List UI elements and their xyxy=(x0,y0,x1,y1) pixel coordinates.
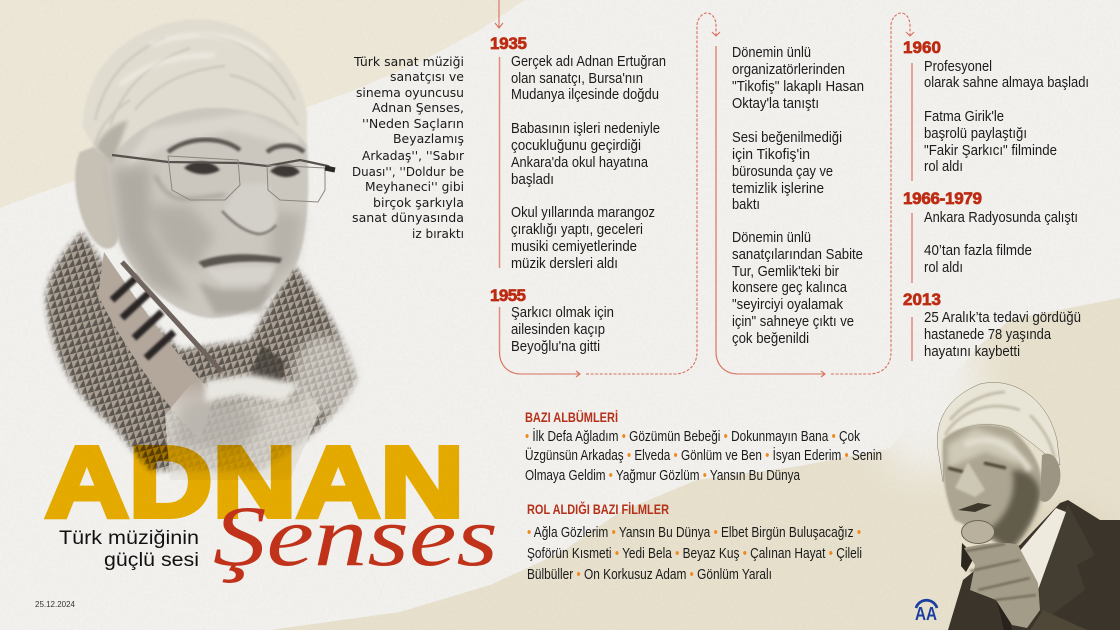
timeline column 2 xyxy=(732,44,864,347)
intro text: ''Neden Saçların xyxy=(362,116,464,131)
timeline column 2: çok beğenildi xyxy=(732,330,809,347)
subtitle xyxy=(59,528,199,571)
timeline column 2: "seyirciyi oyalamak xyxy=(732,296,843,313)
films list xyxy=(527,500,862,583)
coat xyxy=(42,230,360,474)
intro text: Duası'', ''Doldur be xyxy=(352,164,464,179)
scarf fade xyxy=(165,370,320,480)
scarf xyxy=(98,252,285,440)
timeline column 3: 2013 xyxy=(903,290,941,309)
timeline column 1: 1955 xyxy=(490,286,526,305)
fingers xyxy=(966,544,1036,600)
coat highlight xyxy=(293,335,357,415)
mouth xyxy=(958,503,992,512)
intro text: Meyhaneci'' gibi xyxy=(365,179,464,194)
timeline column 3: başrolü paylaştığı xyxy=(924,125,1027,142)
timeline column 3: rol aldı xyxy=(924,259,963,276)
timeline column 3: 25 Aralık’ta tedavi gördüğü xyxy=(924,309,1081,326)
timeline column 1: müzik dersleri aldı xyxy=(511,255,618,272)
nose xyxy=(955,462,985,497)
timeline column 2: "Tikofiş" lakaplı Hasan xyxy=(732,78,864,95)
timeline column 3: Profesyonel xyxy=(924,58,992,75)
timeline column 1 xyxy=(490,34,666,355)
timeline column 1: Mudanya ilçesinde doğdu xyxy=(511,86,659,103)
logo: AA: AA xyxy=(915,604,937,624)
timeline column 2: Sesi beğenilmediği xyxy=(732,129,842,146)
timeline column 1: Beyoğlu'na gitti xyxy=(511,338,600,355)
jacket xyxy=(948,500,1120,630)
head shading xyxy=(948,428,1040,550)
intro text xyxy=(352,54,465,241)
timeline column 3 xyxy=(903,38,1089,360)
glasses xyxy=(112,155,335,202)
timeline column 1: başladı xyxy=(511,171,554,188)
timeline column 1: Okul yıllarında marangoz xyxy=(511,204,655,221)
timeline path with arrows xyxy=(495,0,914,377)
intro text: Beyazlamış xyxy=(393,131,464,146)
films list: • Ağla Gözlerim • Yansın Bu Dünya • Elbet Birgün Buluşacağız • xyxy=(527,524,861,541)
subtitle: Türk müziğinin xyxy=(59,528,199,549)
title: ADNAN: ADNAN xyxy=(45,426,464,538)
timeline column 1: musiki cemiyetlerinde xyxy=(511,238,637,255)
intro text: sanat dünyasında xyxy=(352,210,464,225)
timeline column 2: bürosunda çay ve xyxy=(732,163,833,180)
microphone xyxy=(961,520,1012,630)
subtitle: güçlü sesi xyxy=(104,550,199,571)
albums list xyxy=(525,409,882,484)
timeline column 1: olan sanatçı, Bursa'nın xyxy=(511,70,643,87)
head xyxy=(942,425,1042,550)
albums list: Üzgünsün Arkadaş • Elveda • Gönlüm ve Ben • İsyan Ederim • Senin xyxy=(525,446,882,464)
albums list: BAZI ALBÜMLERİ xyxy=(525,409,618,425)
intro text: birçok şarkıyla xyxy=(373,195,464,210)
intro text: sinema oyuncusu xyxy=(356,85,464,100)
timeline column 2: için Tikofiş'in xyxy=(732,146,810,163)
timeline column 2: Dönemin ünlü xyxy=(732,229,811,246)
jacket lapel xyxy=(1038,505,1095,622)
intro text: iz bıraktı xyxy=(412,226,464,241)
albums list: Olmaya Geldim • Yağmur Gözlüm • Yansın Bu Dünya xyxy=(525,467,801,484)
date: 25.12.2024 xyxy=(35,600,76,609)
singer photo xyxy=(937,382,1120,630)
hair xyxy=(937,382,1060,482)
timeline column 1: 1935 xyxy=(490,34,527,53)
portrait of Adnan Şenses xyxy=(42,20,360,480)
timeline column 2: konsere geç kalınca xyxy=(732,279,848,296)
face shading xyxy=(112,112,303,314)
timeline column 3: 1960 xyxy=(903,38,941,57)
intro text: Adnan Şenses, xyxy=(372,100,464,115)
intro text: Arkadaş'', ''Sabır xyxy=(362,148,465,163)
hand xyxy=(964,543,1040,628)
timeline column 1: Gerçek adı Adnan Ertuğran xyxy=(511,53,666,70)
ear xyxy=(1040,454,1060,502)
eyes xyxy=(184,161,300,177)
shirt xyxy=(1018,508,1066,590)
films list: Şoförün Kısmeti • Yedi Bela • Beyaz Kuş • Çalınan Hayat • Çileli xyxy=(527,545,862,562)
title: Şenses: Şenses xyxy=(213,488,498,584)
films list: Bülbüller • On Korkusuz Adam • Gönlüm Yaralı xyxy=(527,566,772,583)
hair xyxy=(83,19,307,165)
sleeve xyxy=(1030,610,1087,630)
mouth xyxy=(198,254,282,284)
films list: ROL ALDIĞI BAZI FİLMLER xyxy=(527,500,669,517)
timeline column 3: Fatma Girik'le xyxy=(924,108,1004,125)
brows xyxy=(168,140,304,152)
closed eyes xyxy=(948,463,1006,472)
timeline column 3: rol aldı xyxy=(924,158,963,175)
intro text: Türk sanat müziği xyxy=(353,54,464,69)
timeline column 2: Tur, Gemlik'teki bir xyxy=(732,263,839,280)
timeline column 2: Oktay'la tanıştı xyxy=(732,95,819,112)
timeline column 1: Ankara'da okul hayatına xyxy=(511,154,649,171)
ear xyxy=(75,146,119,249)
timeline column 2: için" sahneye çıktı ve xyxy=(732,313,854,330)
timeline column 1: Şarkıcı olmak için xyxy=(511,304,614,321)
timeline column 1: çıraklığı yaptı, geceleri xyxy=(511,221,643,238)
intro text: sanatçısı ve xyxy=(390,69,464,84)
timeline column 2: temizlik işlerine xyxy=(732,180,824,197)
timeline column 2: Dönemin ünlü xyxy=(732,44,811,61)
face xyxy=(107,104,308,318)
timeline column 2: sanatçılarından Sabite xyxy=(732,246,863,263)
albums list: • İlk Defa Ağladım • Gözümün Bebeği • Dokunmayın Bana • Çok xyxy=(525,427,860,445)
timeline column 3: hastanede 78 yaşında xyxy=(924,326,1052,343)
timeline column 3: "Fakir Şarkıcı" filminde xyxy=(924,142,1057,159)
timeline column 1: çocukluğunu geçirdiği xyxy=(511,137,641,154)
timeline column 3: 40’tan fazla filmde xyxy=(924,242,1032,259)
timeline column 2: organizatörlerinden xyxy=(732,61,845,78)
timeline column 3: Ankara Radyosunda çalıştı xyxy=(924,209,1078,226)
timeline column 1: Babasının işleri nedeniyle xyxy=(511,120,660,137)
timeline column 3: 1966-1979 xyxy=(903,189,982,208)
timeline column 3: hayatını kaybetti xyxy=(924,343,1020,360)
timeline column 1: ailesinden kaçıp xyxy=(511,321,605,338)
timeline column 2: baktı xyxy=(732,196,760,213)
timeline column 3: olarak sahne almaya başladı xyxy=(924,74,1089,91)
nose xyxy=(222,182,278,234)
